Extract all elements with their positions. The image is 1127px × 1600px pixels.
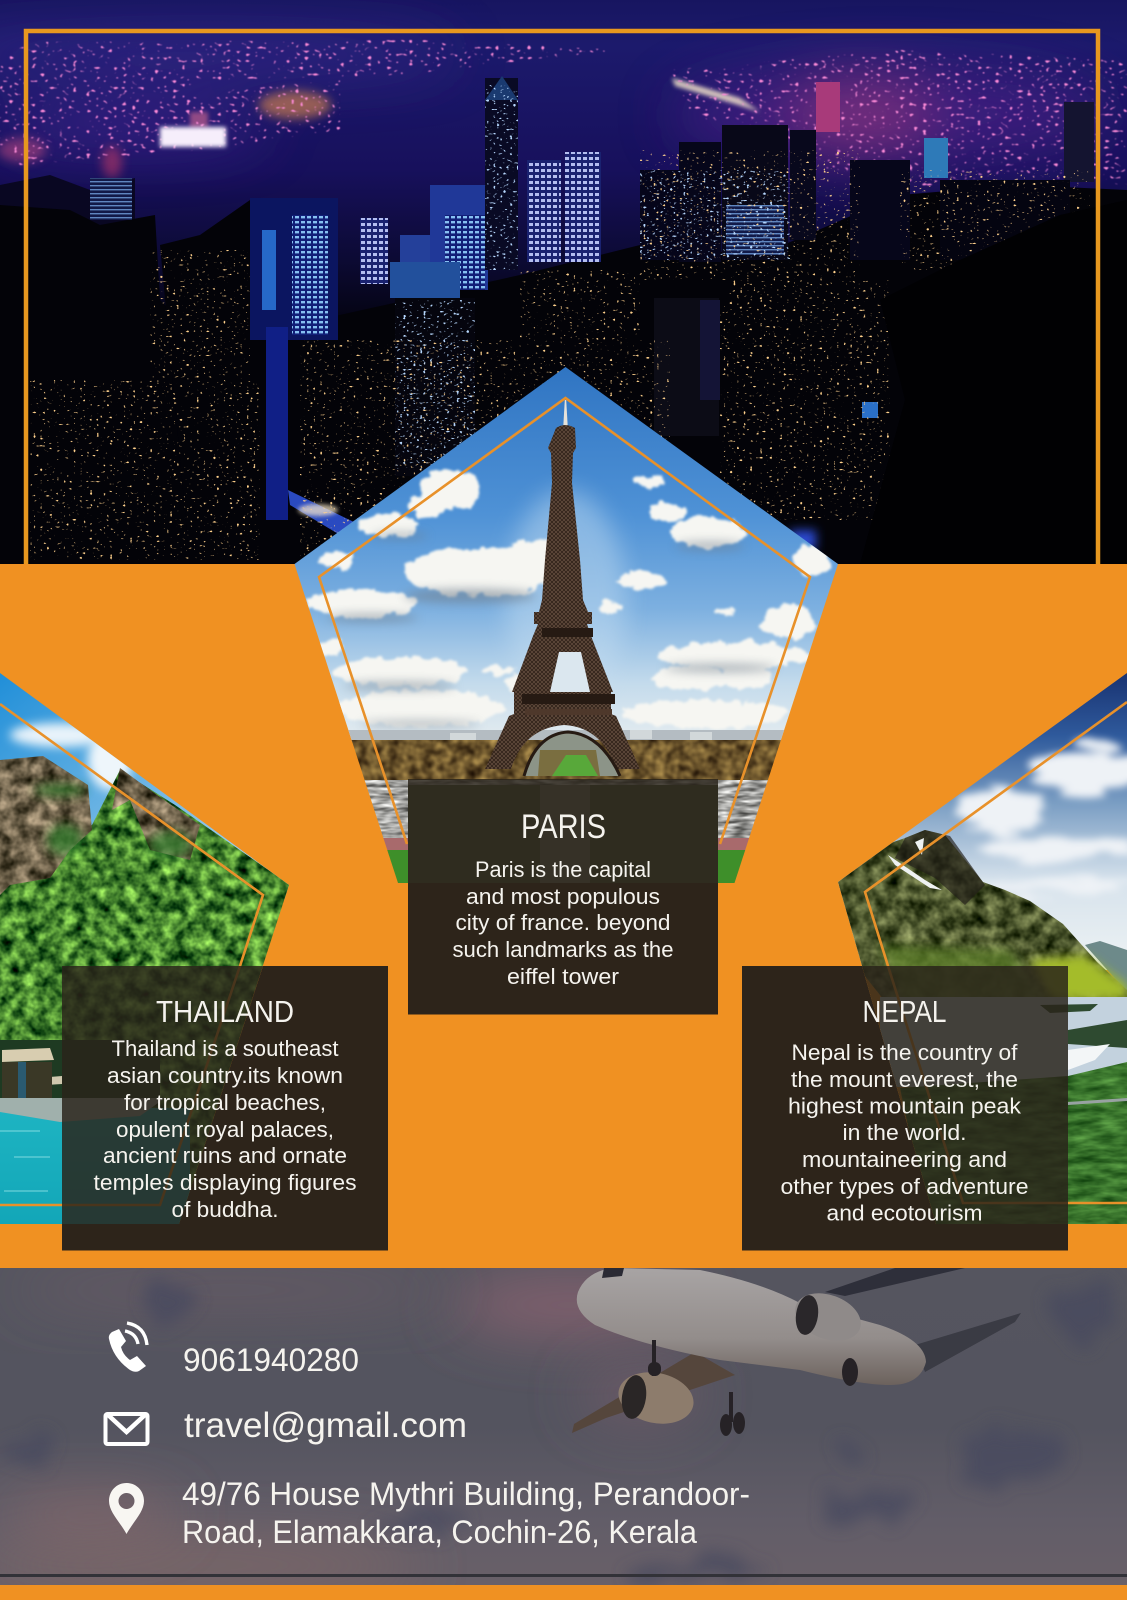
text: postal address: 49/76 House Mythri Building, Perandoor-	[182, 1476, 750, 1512]
city horizon and trees	[340, 730, 790, 742]
turquoise water	[0, 1108, 190, 1227]
text: postal address	[182, 1476, 750, 1550]
paragraph: Thailand description: Thailand is a southeast	[112, 1036, 339, 1061]
paragraph: Nepal description: the mount everest, the	[791, 1067, 1018, 1092]
paragraph: Paris description: eiffel tower	[507, 964, 620, 989]
paragraph: Paris description: such landmarks as the	[452, 937, 674, 962]
foreground esplanade	[364, 780, 768, 840]
lake	[880, 997, 1127, 1087]
paragraph: Nepal description: highest mountain peak	[788, 1094, 1022, 1118]
text: phone number: 9061940280	[183, 1342, 359, 1378]
panel: Thailand photo pentagon	[0, 670, 300, 1227]
paragraph: Nepal description: and ecotourism	[826, 1200, 982, 1226]
text: email address: travel@gmail.com	[184, 1406, 467, 1445]
near dark building masses	[0, 187, 1127, 326]
paragraph: Paris description: Paris is the capital	[475, 857, 651, 882]
heading: Thailand: THAILAND	[156, 994, 294, 1029]
paragraph: Thailand description: opulent royal palaces,	[116, 1117, 334, 1142]
green land	[900, 1062, 1127, 1230]
paragraph: Paris description: city of france. beyond	[456, 910, 670, 935]
paragraph: Thailand description: of buddha.	[172, 1197, 278, 1222]
callout box: Nepal	[742, 966, 1068, 1250]
paragraph: Nepal description	[780, 1040, 1028, 1226]
paragraph: Thailand description: ancient ruins and ornate	[103, 1143, 347, 1168]
paragraph: Nepal description: other types of adventure	[780, 1174, 1028, 1199]
paragraph: Nepal description: in the world.	[842, 1120, 966, 1145]
icon: telephone	[109, 1323, 147, 1372]
Eiffel tower	[485, 400, 640, 776]
paragraph: Thailand description: asian country.its known	[107, 1063, 343, 1088]
decorative frame on city photo	[26, 31, 1098, 564]
icon: envelope	[106, 1414, 148, 1444]
paragraph: Thailand description	[94, 1036, 356, 1222]
heading: Nepal: NEPAL	[862, 994, 946, 1029]
heading: Paris: PARIS	[521, 808, 606, 846]
far mountain	[1085, 941, 1127, 992]
paragraph: Paris description	[452, 857, 674, 989]
paragraph: Paris description: and most populous	[466, 884, 660, 909]
orange background band	[0, 564, 1127, 1268]
boat	[0, 1040, 165, 1122]
callout box: Thailand	[62, 966, 388, 1250]
paragraph: Nepal description: mountaineering and	[802, 1147, 1007, 1172]
Nepal inner outline	[865, 702, 1127, 1203]
main mountain	[838, 830, 1127, 997]
paragraph: Nepal description: Nepal is the country of	[792, 1040, 1018, 1065]
sky streaks	[950, 748, 1127, 893]
panel: footer sky with airplane	[0, 1268, 1127, 1589]
callout box: Paris	[408, 779, 718, 1014]
green forest	[0, 770, 290, 1224]
paragraph: Thailand description: temples displaying figures	[94, 1170, 356, 1195]
panel: Nepal photo pentagon	[838, 670, 1127, 1230]
airplane	[572, 1268, 1021, 1436]
lit buildings	[90, 76, 1094, 550]
paragraph: Thailand description: for tropical beaches,	[124, 1090, 326, 1115]
text: postal address: Road, Elamakkara, Cochin-26, Kerala	[182, 1514, 697, 1550]
Thailand inner outline	[0, 704, 263, 1205]
icon: map pin	[109, 1483, 144, 1534]
foreground hill darkness	[872, 212, 1090, 520]
clouds	[306, 470, 832, 728]
panel: night city photo	[0, 0, 1127, 564]
panel: Paris photo pentagon	[290, 365, 840, 886]
Paris inner outline	[319, 398, 810, 844]
window lights	[395, 85, 790, 470]
rock cliffs	[0, 756, 92, 895]
far shore lights	[0, 40, 1127, 190]
